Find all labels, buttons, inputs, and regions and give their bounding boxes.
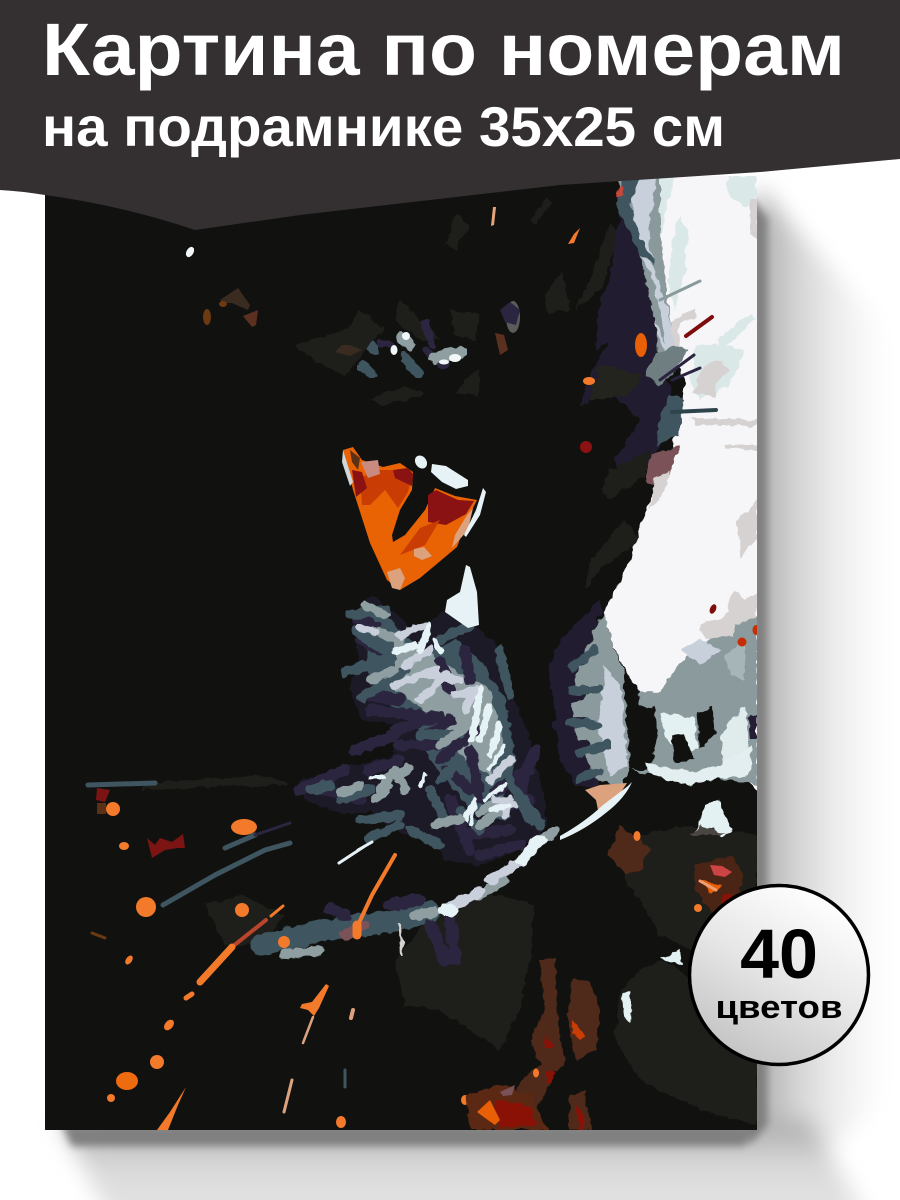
white flecks in lower fur bbox=[622, 800, 732, 1022]
tuft under eye bbox=[445, 565, 479, 628]
subtitle: на подрамнике 35х25 см bbox=[42, 95, 725, 158]
brow fur above eye bbox=[184, 207, 520, 356]
small red details bbox=[96, 441, 592, 858]
white fur area bbox=[604, 176, 757, 790]
grey under-fringe bbox=[618, 176, 676, 370]
whisker-pad band bbox=[262, 832, 555, 960]
painting: black cat with orange eye bbox=[45, 170, 770, 1130]
nose and neck fur bbox=[548, 600, 630, 790]
central neck fur base bbox=[298, 595, 548, 865]
olive dark fur patches bbox=[140, 195, 757, 1125]
light teal patches bbox=[650, 176, 757, 400]
cat eye: orange iris bbox=[342, 447, 486, 590]
lower-right grey fur with black lobes bbox=[627, 615, 757, 785]
central neck fur strands bbox=[300, 605, 540, 855]
warm grey patches bbox=[665, 198, 757, 630]
blue-grey fringe bbox=[630, 176, 675, 360]
whisker strands bbox=[88, 783, 395, 1112]
title: Картина по номерам bbox=[42, 8, 845, 91]
badge: 40 colours: цветов bbox=[716, 989, 842, 1025]
badge: 40 colours bbox=[690, 886, 868, 1064]
header banner bbox=[0, 0, 900, 230]
orange paint splatters bbox=[106, 228, 647, 1130]
canvas drop shadow bbox=[60, 185, 890, 1200]
purple fur edge, upper right bbox=[580, 178, 688, 510]
lower right brown and red paint bbox=[465, 825, 745, 1130]
nose tip bbox=[585, 783, 627, 810]
badge: 40 colours: 40 bbox=[740, 915, 818, 993]
red specks on fur bbox=[708, 603, 760, 646]
